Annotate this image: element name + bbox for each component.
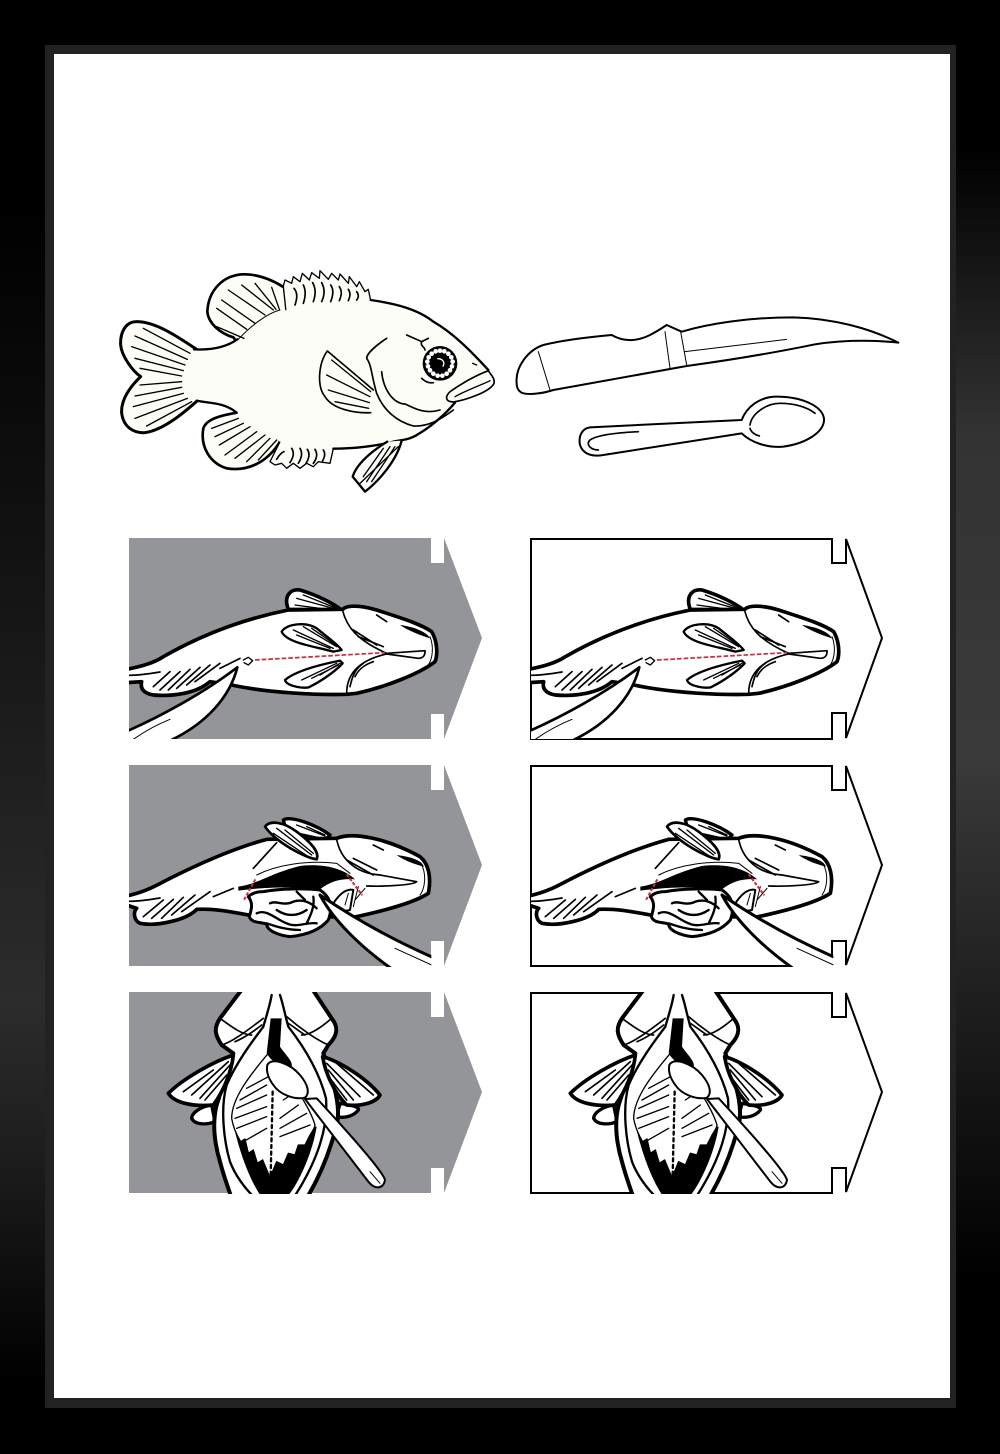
mouth wedge bbox=[397, 855, 424, 867]
tail fin bbox=[121, 322, 200, 433]
fish belly with dashed cut line, copy bbox=[529, 590, 839, 741]
pectoral fins bbox=[282, 624, 342, 652]
small rear fins bbox=[192, 1105, 215, 1124]
gut lobe near head bbox=[333, 890, 353, 911]
left pectoral fin bbox=[168, 1055, 233, 1105]
knife blade bbox=[320, 895, 435, 970]
fish belly with dashed cut line bbox=[127, 590, 437, 741]
body bbox=[127, 836, 430, 924]
rear dorsal fin bbox=[283, 819, 330, 840]
opened fish with guts bbox=[127, 819, 435, 970]
flesh with ribs bbox=[232, 1053, 315, 1178]
guts bbox=[248, 889, 331, 937]
panel: step 2, outlined arrow bbox=[531, 766, 882, 966]
body bbox=[127, 606, 437, 695]
pectoral fin bbox=[265, 823, 317, 859]
pectoral fin bbox=[320, 351, 373, 413]
red dashed cut line bbox=[255, 653, 385, 660]
tail lines and fin rays bbox=[129, 615, 387, 690]
panel: step 2, grey arrow bbox=[129, 765, 482, 966]
dark material near spoon bbox=[267, 1018, 292, 1069]
fin rays bbox=[132, 283, 279, 462]
knife blade bbox=[127, 667, 237, 741]
flesh strips and head folds bbox=[223, 995, 326, 1196]
knife bbox=[517, 317, 898, 394]
cleaned fish with spoon bbox=[168, 987, 385, 1198]
dorsal soft fin bbox=[207, 274, 288, 344]
panel: step 1, outlined arrow bbox=[531, 539, 882, 739]
gill cover lines bbox=[367, 335, 453, 426]
anal soft fin bbox=[203, 410, 280, 469]
panel: step 1, grey arrow bbox=[129, 538, 482, 739]
panel: step 3, grey arrow bbox=[129, 992, 482, 1193]
right pectoral fin bbox=[323, 1057, 380, 1105]
vent bbox=[243, 657, 253, 665]
red cut marks bbox=[244, 874, 362, 900]
cleaned fish with spoon, copy bbox=[570, 987, 787, 1198]
spoon bbox=[580, 397, 824, 456]
whole fish illustration bbox=[121, 271, 494, 492]
opened fish with guts, copy bbox=[529, 819, 837, 970]
body silhouette bbox=[214, 987, 338, 1198]
dorsal spines bbox=[283, 271, 371, 318]
lower cavity bbox=[235, 1127, 317, 1196]
body fill bbox=[185, 300, 494, 449]
backbone bbox=[271, 1092, 273, 1175]
mouth wedge bbox=[400, 625, 430, 638]
dorsal fin bbox=[287, 590, 342, 610]
body cavity bbox=[238, 865, 355, 891]
eye bbox=[423, 346, 457, 381]
anal fin rays bbox=[129, 888, 233, 918]
pelvic fin bbox=[353, 441, 402, 492]
panel: step 3, outlined arrow bbox=[531, 993, 882, 1193]
anal spines bbox=[270, 433, 333, 468]
spoon bbox=[267, 1061, 385, 1187]
body outline bbox=[194, 300, 488, 449]
mouth bbox=[447, 371, 494, 402]
head and gill lines bbox=[343, 611, 425, 693]
head lines bbox=[253, 839, 417, 886]
